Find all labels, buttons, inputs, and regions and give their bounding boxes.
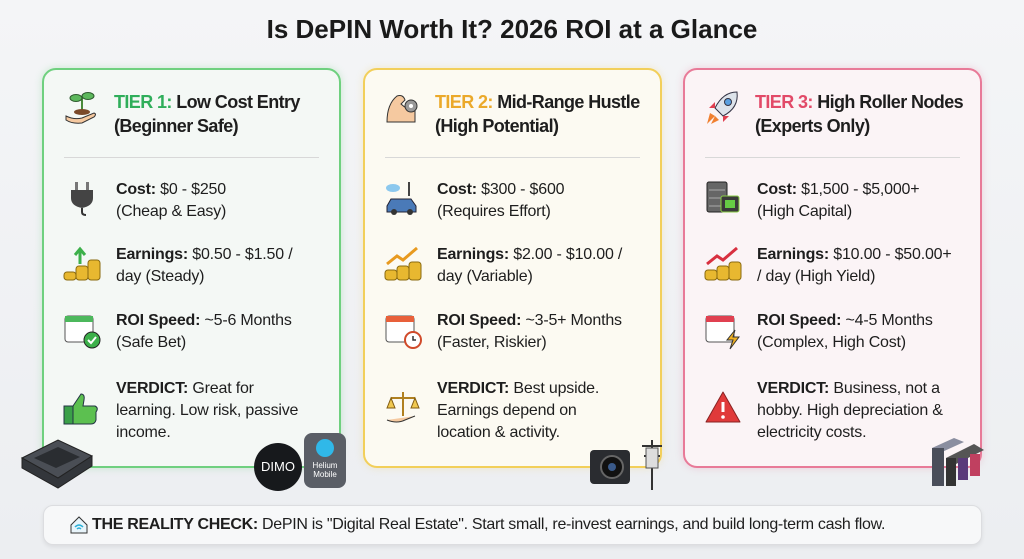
row: cost: (Cheap & Easy): [116, 203, 226, 220]
row: earnings: day (Steady): [116, 268, 204, 285]
heading: tier 3: [755, 92, 963, 136]
row: verdict: location & activity.: [437, 424, 560, 441]
logos: DIMO & Helium: Mobile: [313, 470, 337, 479]
panel: tier 1: [42, 68, 341, 468]
row: earnings: Earnings: $0.50 - $1.50 /: [116, 246, 292, 263]
row: roi: ROI Speed: ~3-5+ Months: [437, 312, 622, 329]
row: earnings: [437, 246, 622, 285]
icon: calendar check: [64, 316, 100, 348]
row: verdict: hobby. High depreciation &: [757, 402, 943, 419]
row: verdict: [757, 380, 943, 441]
row: roi: [437, 312, 622, 351]
heading: tier 1: (Beginner Safe): [114, 116, 238, 136]
icon: car & cloud: [386, 182, 416, 215]
row: earnings: / day (High Yield): [757, 268, 875, 285]
title: Is DePIN Worth It? 2026 ROI at a Glance: [267, 14, 757, 44]
heading: tier 2: [435, 92, 640, 136]
panel: tier 3: [683, 68, 982, 468]
row: roi: (Safe Bet): [116, 334, 186, 351]
row: verdict: VERDICT: Great for: [116, 380, 254, 397]
icon: coins up: [64, 246, 100, 280]
logos: DIMO & Helium: DIMO: [261, 459, 295, 474]
logos: DIMO & Helium: [254, 433, 346, 491]
row: cost: [116, 181, 226, 220]
callout: reality check: [43, 505, 982, 545]
row: verdict: VERDICT: Best upside.: [437, 380, 599, 397]
row: earnings: [116, 246, 293, 285]
row: roi: ROI Speed: ~4-5 Months: [757, 312, 933, 329]
row: earnings: Earnings: $10.00 - $50.00+: [757, 246, 951, 263]
icon: plug: [71, 182, 93, 216]
row: verdict: electricity costs.: [757, 424, 866, 441]
row: roi: (Complex, High Cost): [757, 334, 906, 351]
icon: thumbs up: [64, 394, 98, 424]
device: DIMO box: [21, 440, 93, 489]
icon: house wifi: [70, 516, 88, 534]
icon: calendar timer: [386, 316, 422, 349]
row: verdict: learning. Low risk, passive: [116, 402, 298, 419]
row: verdict: VERDICT: Business, not a: [757, 380, 940, 397]
row: verdict: Earnings depend on: [437, 402, 577, 419]
icon: warning: [706, 392, 740, 422]
logos: DIMO & Helium: Helium: [313, 461, 337, 470]
row: verdict: [116, 380, 298, 441]
heading: tier 3: (Experts Only): [755, 116, 870, 136]
panel: tier 2: [363, 68, 662, 468]
row: cost: Cost: $1,500 - $5,000+: [757, 181, 919, 198]
icon: server gpu: [706, 182, 740, 212]
icon: coins chart red: [704, 247, 742, 280]
heading: tier 3: TIER 3: High Roller Nodes: [755, 92, 963, 112]
row: cost: Cost: $0 - $250: [116, 181, 226, 198]
row: roi: [757, 312, 933, 351]
row: roi: (Faster, Riskier): [437, 334, 546, 351]
row: verdict: [437, 380, 599, 441]
icon: calendar bolt: [706, 316, 740, 350]
heading: tier 1: [114, 92, 300, 136]
row: roi: ROI Speed: ~5-6 Months: [116, 312, 292, 329]
row: earnings: Earnings: $2.00 - $10.00 /: [437, 246, 622, 263]
icon: plant in hand: [66, 92, 96, 124]
row: cost: [437, 181, 564, 220]
row: cost: Cost: $300 - $600: [437, 181, 564, 198]
device: GPU rig: [932, 438, 984, 486]
icon: rocket: [707, 92, 738, 124]
heading: tier 2: (High Potential): [435, 116, 558, 136]
heading: tier 2: TIER 2: Mid-Range Hustle: [435, 92, 640, 112]
callout: reality check: THE REALITY CHECK: DePIN is "Digital Real Estate". Start small, re-invest earnings, and build long-term cash flow.: [92, 516, 885, 533]
row: cost: (Requires Effort): [437, 203, 551, 220]
row: earnings: [757, 246, 951, 285]
row: cost: [757, 181, 919, 220]
row: verdict: income.: [116, 424, 171, 441]
row: roi: [116, 312, 292, 351]
icon: scales: [386, 392, 420, 422]
device: camera & weather station: [590, 440, 662, 490]
row: cost: (High Capital): [757, 203, 852, 220]
icon: arm gear: [386, 95, 418, 122]
heading: tier 1: TIER 1: Low Cost Entry: [114, 92, 300, 112]
row: earnings: day (Variable): [437, 268, 533, 285]
icon: coins chart: [384, 246, 422, 280]
